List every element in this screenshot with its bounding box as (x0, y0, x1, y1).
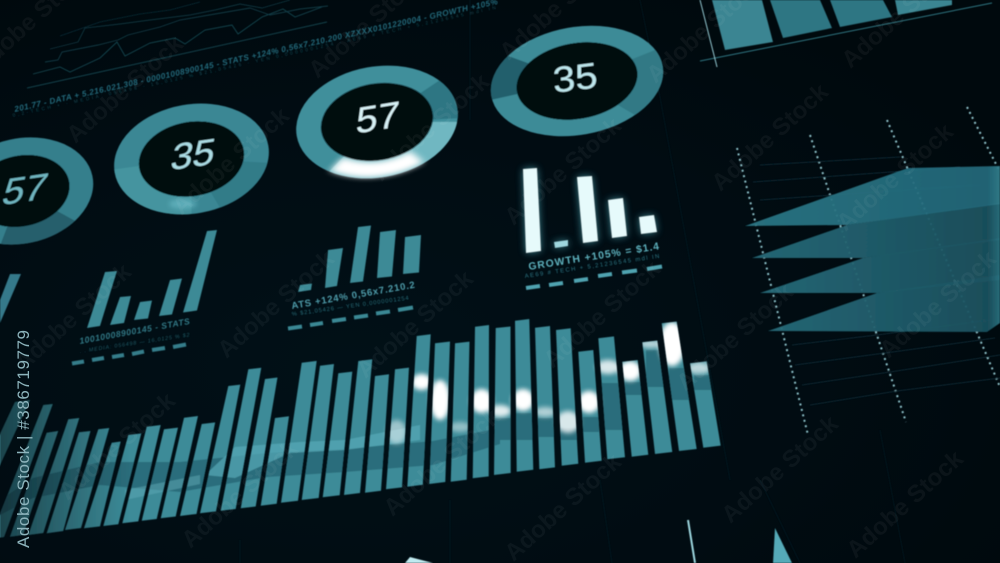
chart C labels: AE69 # TECH + 5,21236545 mdl IN (524, 254, 660, 280)
donut ring 1 (0, 135, 90, 247)
ring 4 value: 35 (552, 55, 599, 101)
left fade over bars (0, 400, 116, 538)
chart A dashes (72, 344, 186, 364)
bottom accent: triangle (773, 528, 792, 563)
ring 2 glow (169, 199, 197, 209)
side stock id label: Adobe Stock | #386719779 (14, 330, 33, 548)
stock watermarks: Adobe Stock (716, 410, 844, 529)
stock watermarks: Adobe Stock (53, 387, 181, 506)
ring 2 value: 35 (168, 131, 219, 179)
stock watermarks: Adobe Stock (176, 435, 304, 554)
stock watermarks: Adobe Stock (538, 255, 666, 374)
data ticker text: 0,2-TECH + - MEDIA: 056498 - 16,0125 % $21,05426 - YEN 0,0000001254 - AE69 # TECH + 5,21236545 mdl IN (12, 5, 497, 119)
ring 3 value: 57 (355, 94, 401, 142)
donut ring 3 (301, 64, 453, 180)
layered area chart: dotted guides (737, 107, 1000, 435)
line chart: top left (27, 0, 328, 88)
glow highlights (386, 322, 711, 444)
chart C labels: GROWTH +105% = $1.4 (528, 241, 660, 273)
donut ring 2 (119, 102, 264, 216)
layered area chart: sheets (745, 166, 1000, 332)
stock watermarks: Adobe Stock (61, 30, 189, 149)
stock watermarks: Adobe Stock (9, 258, 137, 377)
donut ring 4 (496, 23, 658, 139)
stock watermarks: Adobe Stock (212, 245, 340, 364)
stock watermarks: Adobe Stock (874, 245, 1000, 364)
stock watermarks: Adobe Stock (351, 265, 479, 384)
dark band across bars (0, 428, 500, 515)
stock watermarks: Adobe Stock (671, 278, 799, 397)
axis lines (700, 3, 992, 61)
stock watermarks: Adobe Stock (831, 118, 959, 237)
chart A labels: . . MEDIA: 056498 — 16,0125 % $2 (79, 332, 190, 355)
stock watermarks: Adobe Stock (706, 78, 834, 197)
left edge partial bar (0, 274, 21, 323)
main bar chart (0, 319, 721, 550)
stock watermarks: Adobe Stock (167, 102, 295, 221)
chart B labels: % $21,05426 — YEN 0,0000001254 (291, 296, 410, 318)
chart B labels: ATS +124% 0,56x7.210.2 (291, 280, 416, 312)
stock watermarks: Adobe Stock (378, 403, 506, 522)
chart A labels: 10010008900145 - STATS (79, 316, 191, 346)
small bright bar chart C (523, 168, 662, 288)
small bar chart B (288, 226, 421, 328)
top right bar chart (700, 0, 992, 67)
chart C dashes (526, 266, 662, 288)
small bar chart A (72, 230, 217, 364)
data ticker text: 201.77 - DATA + 5.216.021.308 - 00001008900145 - STATS +124% 0,56x7.210.200 XZXXX0101220004 - GROWTH +105% (12, 0, 499, 114)
light band across bars (205, 425, 420, 478)
bottom accent: glowing shape (405, 557, 433, 563)
stock watermarks: Adobe Stock (367, 68, 495, 187)
stock watermarks: Adobe Stock (499, 112, 627, 231)
stock watermarks: Adobe Stock (841, 445, 969, 563)
stock watermarks: Adobe Stock (499, 448, 627, 563)
chart B dashes (288, 308, 413, 328)
bottom accent: vertical line (688, 520, 695, 563)
dark segments on right bars (495, 350, 714, 440)
